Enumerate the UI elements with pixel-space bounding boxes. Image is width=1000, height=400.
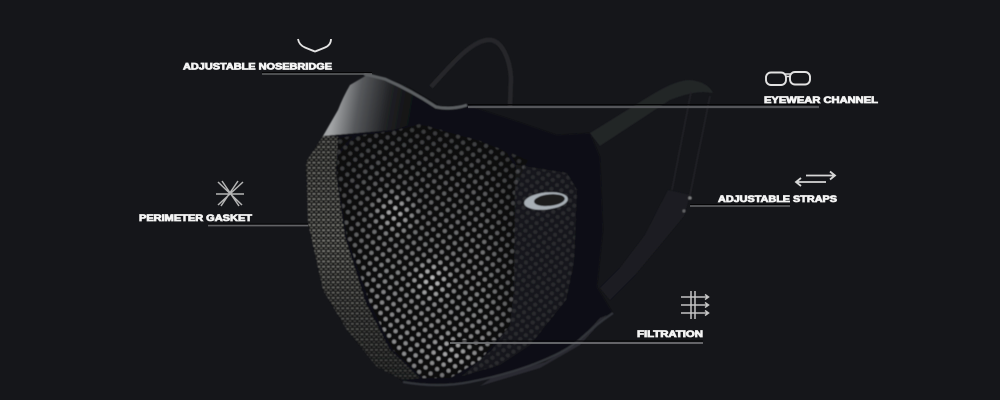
callout: filtration — [450, 291, 708, 343]
right mesh panel — [462, 165, 577, 376]
leader line: eyewear — [468, 104, 819, 106]
icon: nosebridge — [298, 39, 331, 52]
callout: adjustable nosebridge — [183, 39, 372, 74]
head strap right upper band — [590, 80, 713, 146]
icon: filter — [681, 291, 708, 319]
strap thin lines — [672, 92, 710, 195]
front dots — [336, 124, 528, 379]
label: filtration: FILTRATION — [637, 329, 703, 339]
leader line: filtration — [450, 340, 703, 342]
strap adjuster — [688, 196, 692, 200]
head strap top — [431, 40, 511, 106]
label: eyewear: EYEWEAR CHANNEL — [764, 95, 879, 105]
nose edge highlight — [364, 74, 467, 108]
leader line: straps — [690, 204, 790, 206]
mesh backing — [306, 122, 577, 382]
label: gasket: PERIMETER GASKET — [139, 213, 253, 223]
soft lower glow — [480, 312, 610, 386]
callout: perimeter gasket — [139, 181, 308, 226]
callout: eyewear channel — [468, 72, 879, 107]
icon: gasket — [216, 181, 244, 206]
strap lower band — [600, 190, 690, 300]
label: straps: ADJUSTABLE STRAPS — [718, 194, 837, 204]
nose panel — [323, 75, 480, 137]
lower rim highlight — [403, 313, 613, 385]
label: nosebridge: ADJUSTABLE NOSEBRIDGE — [183, 61, 332, 71]
side perforated edge — [306, 136, 420, 380]
logo — [523, 190, 569, 212]
mask body — [360, 73, 613, 386]
icon: arrows — [796, 172, 835, 186]
icon: glasses — [766, 72, 810, 85]
mask illustration — [300, 40, 713, 400]
callout: adjustable straps — [690, 172, 837, 206]
leader line: nosebridge — [262, 72, 372, 74]
leader line: gasket — [208, 223, 308, 225]
